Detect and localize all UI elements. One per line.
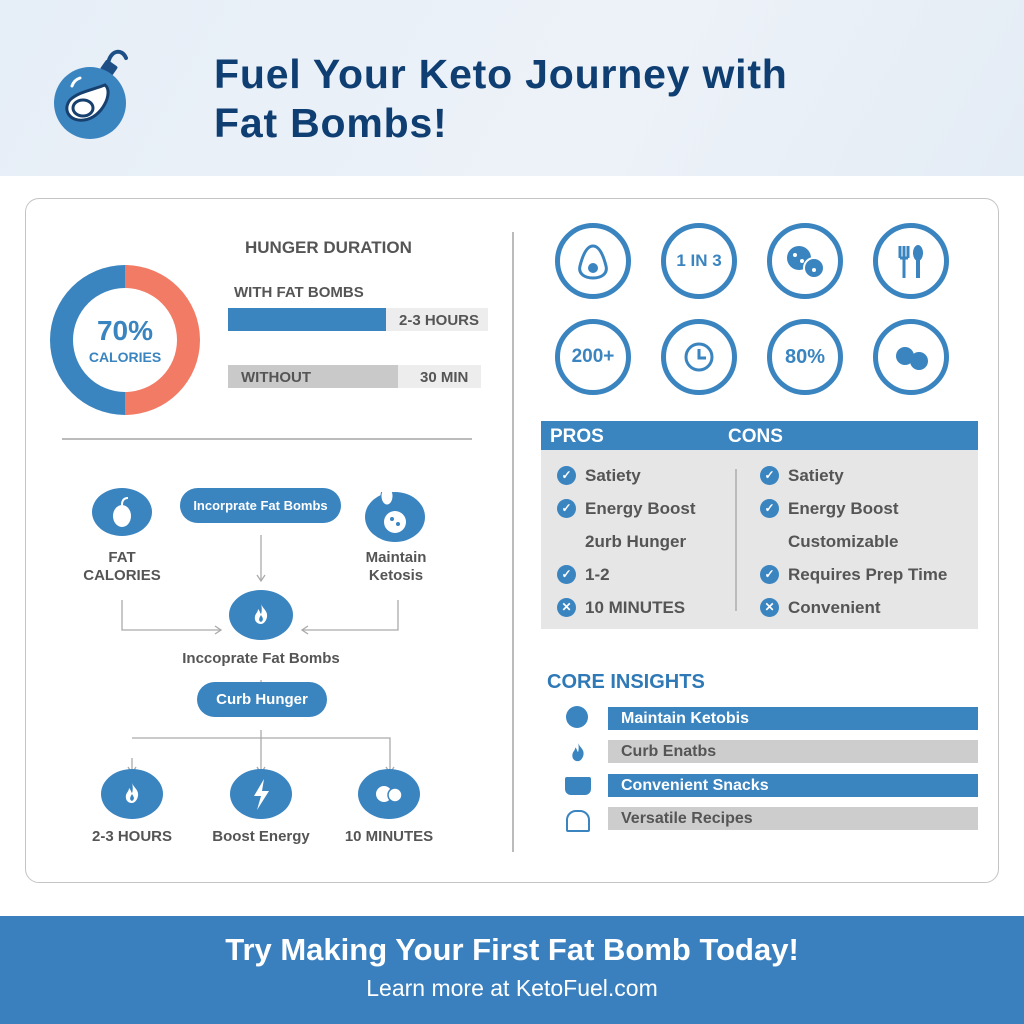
panel: pros and cons: Satiety	[585, 466, 641, 485]
panel: pros and cons: Requires Prep Time	[788, 565, 947, 584]
donut chart: 70%	[97, 315, 153, 346]
panel: pros and cons: CONS	[728, 426, 783, 447]
text: maintain ketosis	[366, 549, 426, 584]
icon: cookies	[767, 223, 843, 299]
list: core insights: Curb Enatbs	[621, 743, 716, 760]
panel: pros and cons: ✓	[561, 567, 572, 581]
icon: flame bottom	[101, 769, 163, 819]
text: maintain ketosis: Maintain	[366, 549, 426, 566]
icon: central flame	[229, 590, 293, 640]
title: Fat Bombs!	[214, 100, 448, 146]
header band	[0, 0, 1024, 176]
panel: pros and cons	[541, 421, 978, 629]
call to action: Try Making Your First Fat Bomb Today!	[225, 932, 799, 967]
panel: pros and cons: 2urb Hunger	[585, 532, 686, 551]
panel: pros and cons: Energy Boost	[585, 499, 696, 518]
panel: pros and cons: Convenient	[788, 598, 881, 617]
icon: fat bombs balls	[358, 769, 420, 819]
flowchart: 10 MINUTES	[345, 828, 433, 845]
bar chart: hunger duration: 30 MIN	[420, 369, 468, 386]
donut chart	[50, 265, 200, 415]
list: core insights: Convenient Snacks	[621, 777, 769, 794]
flow node: incorporate fat bombs	[180, 488, 341, 523]
text: fat calories: CALORIES	[83, 567, 161, 584]
panel: pros and cons: 10 MINUTES	[585, 598, 685, 617]
panel: pros and cons: ✓	[764, 468, 775, 482]
icon grid: 200+	[572, 346, 614, 367]
footer link text: Learn more at KetoFuel.com	[366, 975, 658, 1001]
flowchart	[83, 488, 433, 845]
text: inccoprate: Inccoprate Fat Bombs	[182, 650, 340, 667]
icon: maintain ketosis	[365, 492, 425, 542]
bar chart: hunger duration: WITH FAT BOMBS	[234, 284, 364, 301]
list: core insights: Versatile Recipes	[621, 810, 753, 827]
panel: pros and cons: ✓	[764, 501, 775, 515]
heading: hunger duration: HUNGER DURATION	[245, 238, 412, 257]
heading: core insights: CORE INSIGHTS	[547, 671, 705, 693]
panel: pros and cons: ✕	[561, 600, 572, 614]
panel: pros and cons: ✓	[561, 501, 572, 515]
icon: avocado	[555, 223, 631, 299]
icon grid	[555, 223, 949, 395]
list: core insights: Maintain Ketobis	[621, 710, 749, 727]
list: core insights	[565, 706, 978, 832]
flowchart: Boost Energy	[212, 828, 310, 845]
bar chart: hunger duration: 2-3 HOURS	[399, 312, 479, 329]
panel: pros and cons: 1-2	[585, 565, 610, 584]
icon: fat calories	[92, 488, 152, 536]
text: fat calories	[83, 549, 161, 584]
icon grid: 1 IN 3	[676, 251, 722, 270]
title: Fuel Your Keto Journey with	[214, 51, 788, 97]
panel: pros and cons: PROS	[550, 426, 604, 447]
donut chart: CALORIES	[89, 349, 161, 365]
icon grid: 80%	[785, 346, 825, 368]
bar chart: hunger duration	[228, 284, 488, 388]
icon: bolt	[230, 769, 292, 819]
panel: pros and cons: ✓	[764, 567, 775, 581]
text: fat calories: FAT	[108, 549, 136, 566]
panel: pros and cons: Customizable	[788, 532, 899, 551]
icon: clock	[661, 319, 737, 395]
title	[214, 51, 788, 146]
icon: avocado bomb logo	[54, 50, 128, 139]
panel: pros and cons: ✓	[561, 468, 572, 482]
flow node: incorporate fat bombs: Incorprate Fat Bombs	[193, 498, 328, 513]
main panel	[25, 198, 999, 883]
flow node: curb hunger: Curb Hunger	[216, 691, 308, 708]
text: maintain ketosis: Ketosis	[369, 567, 423, 584]
panel: pros and cons: Energy Boost	[788, 499, 899, 518]
labels bottom: 2-3 HOURS	[92, 828, 172, 845]
flow node: curb hunger	[197, 682, 327, 717]
panel: pros and cons: ✕	[764, 600, 775, 614]
panel: pros and cons: Satiety	[788, 466, 844, 485]
footer band	[0, 916, 1024, 1024]
icon: bombs	[873, 319, 949, 395]
bar chart: hunger duration: WITHOUT	[241, 369, 311, 386]
icon: cutlery	[873, 223, 949, 299]
